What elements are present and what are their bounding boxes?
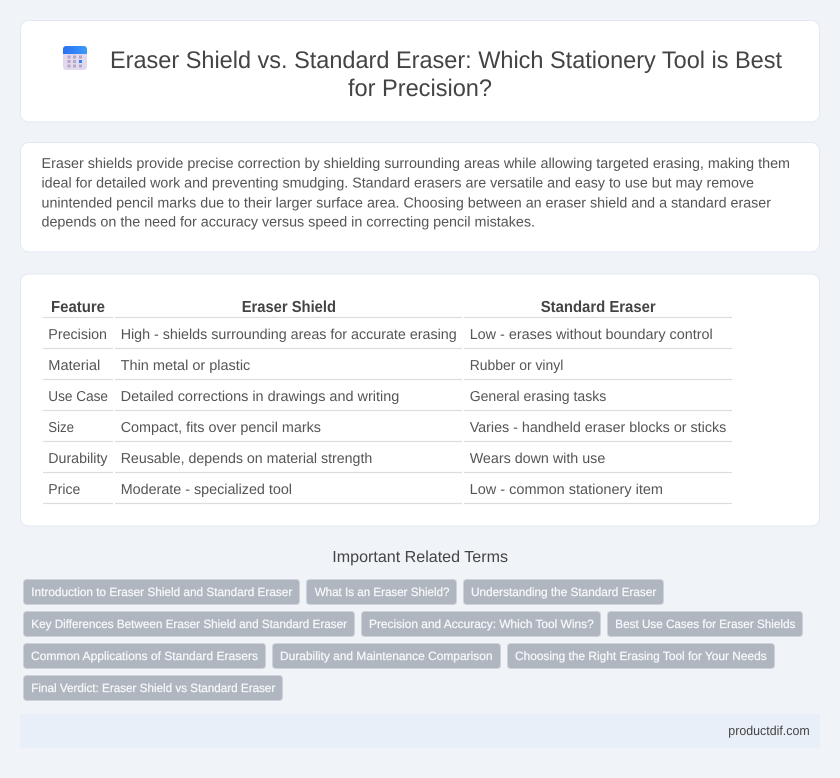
tag: Precision and Accuracy: Which Tool Wins?: [369, 617, 594, 631]
table row: price: Moderate - specialized tool: [121, 482, 292, 498]
table row: precision: Low - erases without boundary control: [470, 327, 713, 343]
title: Eraser Shield vs. Standard Eraser: Which Stationery Tool is Best: [110, 47, 782, 74]
tag: What Is an Eraser Shield?: [315, 585, 450, 599]
tag: [24, 644, 266, 668]
table row: price: [43, 482, 732, 504]
table row: material: Thin metal or plastic: [121, 358, 250, 374]
title: [110, 47, 782, 102]
tag: Final Verdict: Eraser Shield vs Standard Eraser: [31, 681, 275, 695]
heading: important related terms: Important Related Terms: [332, 549, 508, 566]
tag: Durability and Maintenance Comparison: [280, 649, 492, 663]
tag: [24, 676, 282, 700]
table row: precision: High - shields surrounding areas for accurate erasing: [121, 327, 457, 343]
tag: Choosing the Right Erasing Tool for Your Needs: [515, 649, 767, 663]
table row: size: Compact, fits over pencil marks: [121, 420, 321, 436]
table header row: Standard Eraser: [541, 299, 656, 316]
tag: [272, 644, 500, 668]
footer bar: [20, 714, 820, 748]
table row: durability: Wears down with use: [470, 451, 605, 467]
tag: Best Use Cases for Eraser Shields: [615, 617, 795, 631]
tag: Introduction to Eraser Shield and Standard Eraser: [31, 585, 292, 599]
tag: [24, 580, 300, 604]
header panel: [20, 20, 820, 122]
table row: precision: Precision: [48, 327, 107, 343]
tag: Understanding the Standard Eraser: [471, 585, 656, 599]
table row: material: Rubber or vinyl: [470, 358, 563, 374]
text block: description: ideal for detailed work and preventing smudging. Standard erasers are versatile and easy to use but may remove: [42, 176, 754, 192]
tag: [508, 644, 774, 668]
table row: size: Size: [48, 420, 74, 436]
table row: use case: General erasing tasks: [470, 389, 606, 405]
footer source text: productdif.com: [728, 723, 810, 738]
tag: Common Applications of Standard Erasers: [31, 649, 258, 663]
table header row: [43, 299, 732, 318]
table row: material: [43, 358, 732, 380]
table row: size: [43, 420, 732, 442]
panel: related term tags: [24, 580, 802, 700]
tag: [464, 580, 664, 604]
table header row: Feature: [51, 299, 105, 316]
table row: price: Price: [48, 482, 80, 498]
panel: introduction paragraph: [20, 142, 820, 252]
tag: [362, 612, 600, 636]
table row: use case: Use Case: [48, 389, 108, 405]
table row: size: Varies - handheld eraser blocks or sticks: [470, 420, 726, 436]
text block: description: unintended pencil marks due to their larger surface area. Choosing between an eraser shield and a standard eraser: [42, 196, 771, 212]
text block: description: Eraser shields provide precise correction by shielding surrounding areas while allowing targeted erasing, making them: [42, 156, 790, 172]
table row: durability: Durability: [48, 451, 108, 467]
tag: Key Differences Between Eraser Shield and Standard Eraser: [31, 617, 347, 631]
table header row: Eraser Shield: [242, 299, 336, 316]
text block: description: [42, 156, 790, 230]
table row: precision: [43, 327, 732, 348]
table row: material: Material: [48, 358, 100, 374]
title: for Precision?: [348, 75, 492, 102]
table row: use case: [43, 389, 732, 410]
table row: use case: Detailed corrections in drawings and writing: [121, 389, 399, 405]
table row: durability: [43, 451, 732, 472]
table row: durability: Reusable, depends on material strength: [121, 451, 372, 467]
panel: comparison table: [20, 274, 820, 526]
tag: [608, 612, 802, 636]
icon: calendar: [63, 46, 87, 70]
text block: description: depends on the need for accuracy versus speed in correcting pencil mistakes.: [42, 214, 535, 230]
tag: [24, 612, 354, 636]
tag: [306, 580, 456, 604]
table row: price: Low - common stationery item: [470, 482, 663, 498]
